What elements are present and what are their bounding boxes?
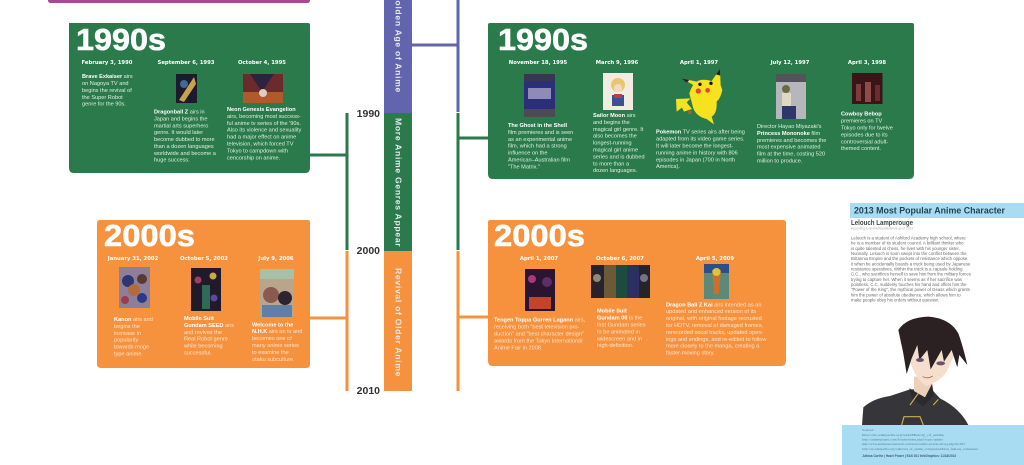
entry: Tengen Toppa Gurren Lagann: Tengen Toppa Gurren Lagann airs,	[494, 318, 586, 324]
entry: Sailor Moon: to more than a	[593, 161, 630, 167]
entry: Sailor Moon: also becomes the	[593, 134, 637, 140]
entry: Dragon Ball Z Kai: updated and enhanced version of its	[666, 309, 756, 315]
entry: Sailor Moon	[593, 60, 645, 174]
entry: Neon Genesis Evangelion: television, which forced TV	[227, 142, 294, 148]
entry: Princess Mononoke: film at the time, costing 520	[757, 152, 825, 158]
entry: Ghost in the Shell: influence on the	[508, 151, 548, 157]
heading: 1990s: 1990s	[76, 22, 166, 57]
year labels: 2000	[357, 245, 380, 257]
entry: Mobile Suit Gundam SEED: successful.	[184, 350, 212, 356]
entry: Princess Mononoke: million to produce.	[757, 158, 803, 164]
entry: Princess Mononoke: Princess Mononoke film	[757, 131, 820, 137]
sources footer: http://en.wikipedia.org/wiki/List_of_anime_companies#Most_famous_companies	[862, 447, 979, 451]
entry: Neon Genesis Evangelion: Also its violence and sexuality	[227, 128, 302, 134]
entry: Tengen Toppa Gurren Lagann: April 1, 2007	[520, 256, 558, 262]
entry: Brave Exkaiser: genre for the 90s.	[82, 102, 126, 108]
heading: 2000s: 2000s	[494, 218, 585, 253]
entry: Dragonball Z: huge success.	[154, 158, 190, 164]
entry: Neon Genesis Evangelion: October 4, 1995	[238, 60, 286, 66]
entry: Cowboy Bebop: Tokyo only for twelve	[841, 126, 893, 132]
entry: Welcome to the NHK: many anime series	[252, 343, 299, 349]
entry: Mobile Suit Gundam 00: widescreen and in	[596, 336, 642, 342]
magenta panel edge	[48, 0, 310, 3]
panel: left 1990s	[69, 22, 310, 173]
sources footer: http://www.animenewsnetwork.com/news/anime-awards-survey.php?id=855	[862, 442, 965, 446]
entry: Mobile Suit Gundam 00: October 6, 2007	[596, 256, 644, 262]
entry: Tengen Toppa Gurren Lagann: receiving both "best television pro-	[494, 325, 579, 331]
entry: Mobile Suit Gundam SEED: while becoming	[183, 344, 223, 350]
entry: Ghost in the Shell: "The Matrix."	[508, 164, 540, 170]
entry: Ghost in the Shell: The Ghost in the Shell	[508, 123, 567, 129]
entry: Dragon Ball Z Kai: rerecorded vocal tracks, updated open-	[666, 330, 763, 336]
entry: Dragon Ball Z Kai	[666, 256, 767, 357]
sources footer	[842, 425, 1024, 465]
panel: right 1990s	[488, 22, 914, 179]
portrait: Lelouch	[862, 317, 968, 425]
character description: he is a member of its student council. A brilliant thinker who	[851, 241, 964, 246]
panel: right 2000s	[488, 218, 786, 366]
era label: revival: Revival of Older Anime	[394, 268, 404, 377]
entry: Neon Genesis Evangelion	[227, 60, 302, 161]
character description: Lelouch is a student of Ashford Academy high school, where	[851, 236, 966, 240]
entry: Brave Exkaiser: on Nagoya TV and	[82, 81, 129, 87]
entry: Mobile Suit Gundam 00: to be animated in	[597, 329, 640, 335]
year labels: 2010	[357, 385, 380, 397]
entry: Brave Exkaiser: Brave Exkaiser airs	[82, 74, 133, 80]
entry: Welcome to the NHK	[252, 256, 302, 363]
name source note: According to AnimeNewsNetwork as of 2013	[851, 226, 913, 230]
icon: Pikachu	[676, 69, 722, 124]
entry: Kanon: towards moge	[114, 345, 149, 351]
left timeline branch	[310, 113, 347, 391]
entry: Brave Exkaiser: February 3, 1990	[82, 60, 133, 66]
character name: Lelouch Lamperouge	[851, 218, 913, 227]
right timeline branch	[412, 0, 488, 391]
character description: Nunnally. Lelouch is soon swept into the conflict between the	[851, 251, 967, 256]
entry: Princess Mononoke: most expensive animated	[757, 145, 820, 151]
heading band	[850, 203, 1024, 218]
entry: Mobile Suit Gundam SEED	[180, 256, 234, 356]
character description	[851, 236, 971, 302]
entry: Cowboy Bebop: episodes due to its	[841, 132, 888, 138]
entry: Cowboy Bebop: Cowboy Bebop	[841, 112, 882, 118]
entry: Mobile Suit Gundam SEED: and revives the	[184, 330, 222, 336]
entry: Pokemon: It will later become the longest-	[656, 144, 733, 150]
entry: Dragon Ball Z Kai: Dragon Ball Z Kai airs intended as an	[666, 302, 761, 308]
entry: Mobile Suit Gundam 00: Mobile Suit	[597, 309, 627, 315]
entry: Mobile Suit Gundam SEED: Mobile Suit	[184, 316, 214, 322]
entry: Pokemon: America).	[656, 164, 680, 170]
entry: Sailor Moon: dozen languages.	[593, 168, 638, 174]
entry: Mobile Suit Gundam SEED: Real Robot genre	[184, 337, 228, 343]
panel: left 2000s	[97, 218, 310, 368]
entry: Welcome to the NHK: N.H.K airs on tv and	[252, 329, 302, 335]
entry: Ghost in the Shell: film premieres and is seen	[508, 130, 573, 136]
entry: Ghost in the Shell: November 18, 1995	[509, 60, 568, 66]
entry: Neon Genesis Evangelion: Neon Genesis Evangelion	[227, 107, 296, 113]
entry: Dragon Ball Z Kai: original, with original footage recrusted	[666, 316, 762, 322]
entry: Sailor Moon: series and is dubbed	[593, 154, 645, 160]
entry: Kanon	[107, 256, 159, 358]
entry: Tengen Toppa Gurren Lagann: Anime Fair in 2008.	[494, 345, 543, 351]
sources footer: Sources:	[862, 428, 874, 432]
character description: it when he accidentally boards a truck being used by Japanese	[851, 261, 971, 266]
panel: most popular character	[842, 203, 1024, 465]
entry: Mobile Suit Gundam 00: Gundam 00 is the	[597, 316, 642, 322]
entry: Pokemon: April 1, 1997	[680, 60, 718, 66]
entry: Mobile Suit Gundam SEED: Gundam SEED airs	[184, 323, 234, 329]
entry: Brave Exkaiser	[82, 60, 133, 108]
entry: Pokemon: adapted from its video game series.	[656, 137, 745, 143]
entry: Kanon: begins the	[114, 324, 140, 330]
entry: Princess Mononoke: Director Hayao Miyazaki's	[757, 124, 822, 130]
entry: Cowboy Bebop: themed content.	[841, 146, 882, 152]
entry: Kanon: January 31, 2002	[107, 256, 159, 262]
entry: Ghost in the Shell: American–Australian film	[508, 158, 570, 164]
entry: Dragon Ball Z Kai: ings and endings, and re-edited to follow	[666, 337, 767, 343]
entry: Tengen Toppa Gurren Lagann	[494, 256, 586, 351]
entry: Sailor Moon: and begins the	[593, 120, 630, 126]
entry: Welcome to the NHK: to examine the	[252, 350, 289, 356]
entry: Dragonball Z: than a dozen languages	[154, 144, 214, 150]
era label: more genres: More Anime Genres Appear	[394, 118, 404, 247]
entry: Tengen Toppa Gurren Lagann: awards from the Tokyo International	[494, 338, 583, 344]
entry: Pokemon: episodes in Japan (700 in North	[656, 157, 735, 163]
character description: make people obey his orders without question.	[851, 298, 940, 302]
entry: Tengen Toppa Gurren Lagann: duction" and "best character design"	[494, 332, 584, 338]
entry: Cowboy Bebop	[841, 60, 893, 152]
entry: Dragonball Z: become dubbed to more	[154, 137, 215, 143]
heading: 1990s: 1990s	[498, 22, 588, 57]
entry: Pokemon: running anime in history with 806	[656, 150, 738, 156]
entry: Brave Exkaiser: the Super Robot	[82, 95, 123, 101]
sources footer: http://en.wikipedia.org/wiki/History_of_anime	[862, 433, 945, 437]
entry: Welcome to the NHK: otaku subculture.	[252, 357, 295, 363]
heading: 2000s: 2000s	[104, 218, 195, 253]
heading band: 2013 Most Popular Anime Character	[854, 206, 1005, 216]
year labels	[357, 108, 380, 397]
sources footer: Julissa Corthe | Hazel Power | EAS 301 InfoGraphics: 11/18/2013	[862, 454, 956, 458]
character description: Britannia Empire and the pockets of resistance which oppose	[851, 256, 968, 261]
entry: Mobile Suit Gundam SEED: October 5, 2002	[180, 256, 228, 262]
entry: Neon Genesis Evangelion: cencorship on anime.	[227, 155, 281, 161]
character description: pointless, C.C. suddenly touches his hand and offers him the	[851, 282, 967, 287]
entry: Dragonball Z: Japan and begins the	[154, 116, 208, 122]
entry: Dragonball Z: Dragonball Z airs in	[154, 110, 205, 116]
character description: "Power of the King", the mythical power of Geass which grants	[851, 287, 970, 292]
entry: Dragonball Z	[153, 60, 217, 164]
entry: Dragon Ball Z Kai: more closely to the manga, creating a	[666, 344, 760, 350]
entry: Cowboy Bebop: April 3, 1998	[848, 60, 886, 66]
entry: Kanon: type anime.	[114, 352, 143, 358]
entry: Neon Genesis Evangelion: airs, becoming most success-	[227, 114, 301, 120]
entry: Neon Genesis Evangelion: ful anime tv series of the '90s.	[227, 121, 301, 127]
entry: Dragonball Z: martial arts superhero	[154, 123, 208, 129]
character description: resistance operatives. Within the truck is a capsule holding	[851, 266, 963, 272]
entry: Dragonball Z: genre. It would later	[154, 130, 203, 136]
entry: Sailor Moon: Sailor Moon airs	[593, 113, 636, 119]
entry: Ghost in the Shell: film, which had a strong	[508, 144, 567, 150]
entry: Cowboy Bebop: premieres on TV	[841, 119, 883, 125]
entry: Kanon: Kanon airs and	[114, 317, 153, 323]
entry: Kanon: increase in	[114, 331, 141, 337]
entry: Sailor Moon: longest-running	[593, 141, 632, 147]
entry: Sailor Moon: magical girl anime	[593, 148, 638, 154]
entry: Ghost in the Shell: as an experimental anime	[508, 137, 572, 143]
entry: Welcome to the NHK: becomes one of	[252, 336, 292, 342]
entry: Princess Mononoke	[757, 60, 826, 164]
entry: Pokemon: Pokemon TV series airs after being	[656, 130, 745, 136]
year labels: 1990	[357, 108, 380, 120]
entry: Dragonball Z: worldwide and become a	[153, 151, 217, 157]
entry: Mobile Suit Gundam 00: first Gundam series	[597, 322, 646, 328]
character description: trying to capture her. When it seems as if her sacrifice was	[851, 277, 962, 282]
entry: Neon Genesis Evangelion: had a major effect on anime	[227, 135, 296, 141]
entry: Sailor Moon: March 9, 1996	[596, 60, 639, 66]
entry: Kanon: popularity	[114, 338, 138, 344]
entry: Neon Genesis Evangelion: Tokyo to campdown with	[227, 148, 288, 154]
entry: Dragon Ball Z Kai: for HDTV, removal of damaged frames,	[666, 323, 764, 329]
central era bar	[384, 0, 412, 391]
entry: Mobile Suit Gundam 00	[591, 256, 650, 349]
entry: Princess Mononoke: July 12, 1997	[770, 60, 810, 66]
sources footer: http://animeplanet.com/forum/index.php?/topic/anime	[862, 438, 943, 442]
entry: Dragon Ball Z Kai: faster-moving story.	[666, 351, 715, 357]
entry: Dragon Ball Z Kai: April 5, 2009	[696, 256, 734, 262]
entry: Welcome to the NHK: July 9, 2006	[257, 256, 294, 262]
character description: C.C., who sacrifices herself to save him from the military forces	[851, 272, 971, 277]
entry: Sailor Moon: magical girl genre. It	[593, 127, 644, 133]
entry: Brave Exkaiser: begins the revival of	[82, 88, 132, 94]
entry: Welcome to the NHK: Welcome to the	[252, 322, 293, 328]
entry: Dragonball Z: September 6, 1993	[158, 60, 215, 66]
entry: Princess Mononoke: premieres and becomes the	[757, 138, 826, 144]
entry: Ghost in the Shell	[508, 60, 573, 170]
character description: him the power of absolute obedience, which allows him to	[851, 292, 961, 297]
entry: Mobile Suit Gundam 00: high-definition.	[597, 343, 634, 349]
entry: Pokemon	[656, 60, 745, 170]
entry: Cowboy Bebop: controversial adult-	[841, 139, 888, 145]
character description: is quite talented at chess, he lives with his younger sister,	[851, 246, 960, 251]
